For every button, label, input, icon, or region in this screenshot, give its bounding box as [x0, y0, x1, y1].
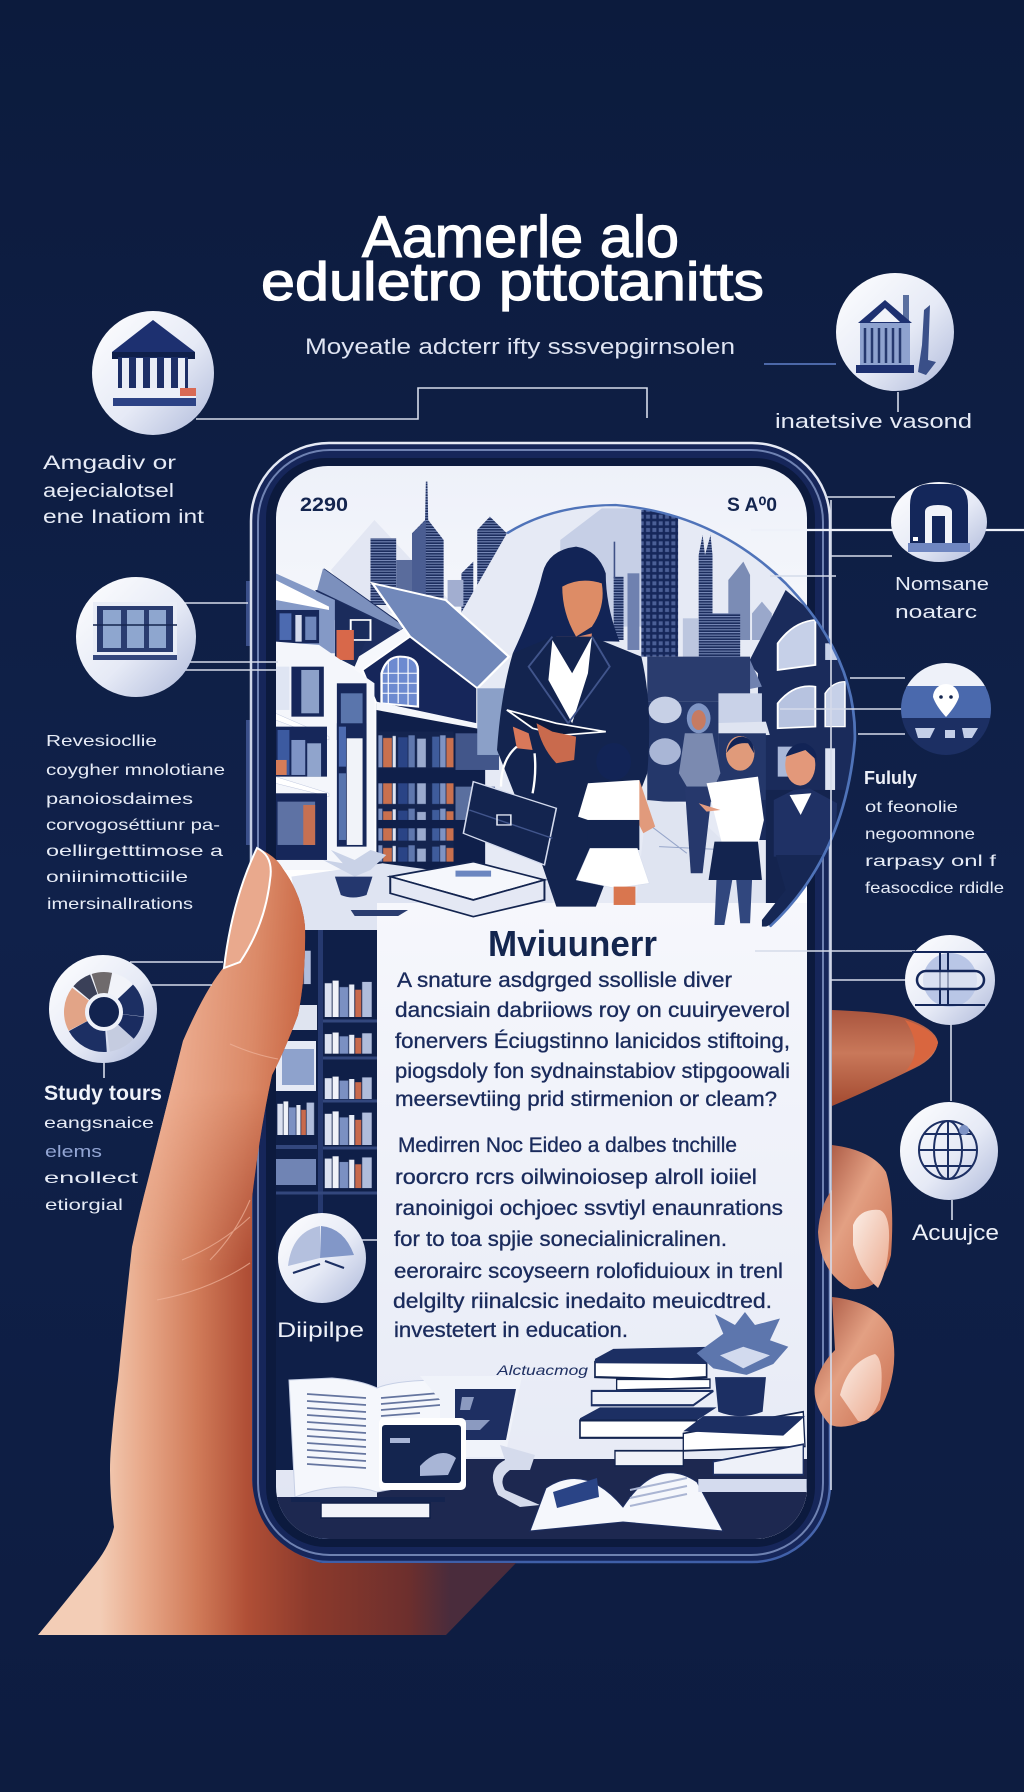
phone screen background [276, 466, 807, 1539]
label: middle left: corvogoséttiunr pa- [46, 817, 220, 834]
white bookcase block [276, 642, 374, 870]
icon: arch [891, 482, 987, 562]
book [507, 710, 606, 735]
finger 3 [815, 1297, 894, 1427]
open book [289, 1378, 445, 1502]
skyline left [331, 482, 507, 614]
dark desk base [276, 1459, 807, 1545]
label: top left: aejecialotsel [43, 481, 174, 502]
panel text: second paragraph: ranoinigoi ochjoec ssvtiyl enaunrations [395, 1197, 783, 1220]
inner bezel [266, 458, 815, 1547]
label: top left [43, 453, 205, 528]
inner band [258, 450, 823, 1555]
panel text: second paragraph: Medirren Noc Eideo a dalbes tnchille [398, 1134, 737, 1157]
bookcase centre [376, 703, 485, 873]
title [261, 205, 764, 312]
icon: windows [76, 577, 196, 697]
icon: map pin [900, 660, 992, 758]
label: study tours: Study tours [44, 1082, 162, 1105]
scene foreground: woman, girl, desk objects [323, 547, 655, 917]
label: map pin: Fululy [864, 768, 917, 788]
label: middle left: Revesiocllie [46, 733, 157, 750]
panel caption: Alctuacmog [496, 1362, 588, 1378]
panel text: first paragraph [395, 969, 790, 1111]
label: map pin [864, 768, 1004, 897]
label: arch: Nomsane [895, 574, 989, 594]
face [562, 581, 603, 637]
label: map pin: feasocdice rdidle [865, 880, 1004, 897]
icon: pie chart [278, 1213, 366, 1303]
outer body [251, 443, 830, 1562]
girl [576, 780, 656, 905]
label: middle left [46, 733, 225, 913]
label: top left: ene Inatiom int [43, 507, 205, 528]
panel text: first paragraph: piogsdoly fon sydnainstabiov stipgoowali [395, 1060, 790, 1083]
finger 1 nail [905, 1020, 938, 1072]
adult in background [679, 703, 720, 873]
label: middle left: coygher mnolotiane [46, 762, 225, 779]
status left: 2290 [300, 495, 348, 516]
finger 2 nail [853, 1210, 889, 1288]
palm and lower thumb [38, 848, 516, 1635]
side buttons [246, 581, 252, 845]
panel text: second paragraph [393, 1134, 783, 1342]
panel text: first paragraph: fonervers Éciugstinno lanicidos stiftoing, [395, 1030, 790, 1053]
label: study tours: etiorgial [45, 1197, 123, 1214]
panel text: second paragraph: delgilty riinalcsic inedaito meuicdtred. [393, 1290, 772, 1313]
thick book on desk [351, 862, 544, 917]
panel text: second paragraph: investetert in education. [394, 1319, 628, 1342]
woman [463, 547, 649, 907]
title: Aamerle alo [362, 205, 679, 270]
icon: globe [900, 1102, 998, 1200]
label: study tours: enollect [44, 1170, 139, 1187]
bubble scene extending over the bezel [462, 506, 854, 903]
phone frame [246, 443, 830, 1562]
hair [513, 547, 620, 653]
bubble outline [507, 505, 855, 927]
left column [302, 950, 311, 984]
connector lines [93, 364, 1024, 1490]
icon: temple [92, 311, 214, 435]
label: study tours: eangsnaice [44, 1115, 154, 1132]
finger 1 [832, 1010, 938, 1106]
desk plant [323, 850, 386, 897]
monitor [423, 1380, 516, 1457]
children in bubble [507, 505, 855, 928]
lapels [529, 637, 610, 723]
thumbnail [224, 848, 271, 968]
panel text: first paragraph: meersevtiing prid stirmenion or cleam? [395, 1088, 777, 1111]
label: arch: noatarc [895, 602, 977, 622]
panel text: first paragraph: A snature asdgrged ssollisle diver [397, 969, 732, 992]
label: middle left: oellirgetttimose a [46, 843, 223, 860]
upper thumb tone [38, 848, 516, 1635]
lower left bookcase [276, 930, 377, 1470]
book stack [580, 1347, 807, 1492]
shirt [548, 637, 592, 723]
blazer [497, 637, 649, 907]
desk [292, 863, 427, 930]
text panel background [377, 903, 807, 1543]
hands [513, 727, 533, 750]
boy [762, 743, 837, 928]
skin creases [157, 1044, 278, 1300]
bag [501, 747, 535, 793]
slab under book [321, 1503, 430, 1518]
right column [324, 980, 372, 1017]
label: map pin: ot feonolie [865, 799, 958, 816]
panel text: second paragraph: eerorairc scoyseern rolofiduioux in trenl [394, 1260, 783, 1283]
label: study tours [44, 1082, 162, 1214]
status right: S A⁰0 [727, 495, 777, 516]
hand and thumb [38, 848, 516, 1635]
panel text: first paragraph: dancsiain dabriiows roy on cuuiryeverol [395, 999, 790, 1022]
left houses [276, 568, 510, 930]
arrow cursor [493, 1445, 540, 1507]
status text on phone [300, 495, 777, 516]
label: study tours: elems [45, 1142, 102, 1161]
icon: donut chart [49, 955, 157, 1063]
label: top right: inatetsive vasond [775, 411, 972, 433]
bottom open book [530, 1473, 723, 1531]
finger 3 nail [840, 1354, 882, 1422]
right houses [750, 590, 854, 840]
phone screen foreground [276, 547, 807, 1545]
label: arch [895, 574, 989, 622]
label: map pin: negoomnone [865, 826, 975, 843]
label: globe: Acuujce [912, 1220, 999, 1245]
finger 2 [818, 1145, 892, 1289]
subtitle: Moyeatle adcterr ifty sssvepgirnsolen [305, 334, 735, 359]
panel heading: Mviuunerr [488, 923, 657, 964]
label: middle left: imersinalIrations [47, 896, 193, 913]
icon: house [836, 273, 954, 391]
desk objects [289, 1312, 807, 1531]
label: pie chart: Diipilpe [277, 1319, 364, 1342]
potted plant [697, 1312, 788, 1416]
label: middle left: panoiosdaimes [46, 791, 193, 808]
label: middle left: oniinimotticiile [46, 869, 188, 886]
label: map pin: rarpasy onl f [865, 853, 997, 870]
icon: band [905, 935, 995, 1025]
girl right [699, 736, 764, 925]
title: eduletro pttotanitts [261, 252, 764, 312]
tablet [379, 1418, 466, 1490]
label: top left: Amgadiv or [43, 453, 177, 474]
fingers over phone edge [815, 1010, 938, 1427]
panel text: second paragraph: for to toa spjie sonecialinicralinen. [394, 1228, 727, 1251]
panel text: second paragraph: roorcro rcrs oilwinoiosep alroll ioiiel [395, 1166, 757, 1189]
